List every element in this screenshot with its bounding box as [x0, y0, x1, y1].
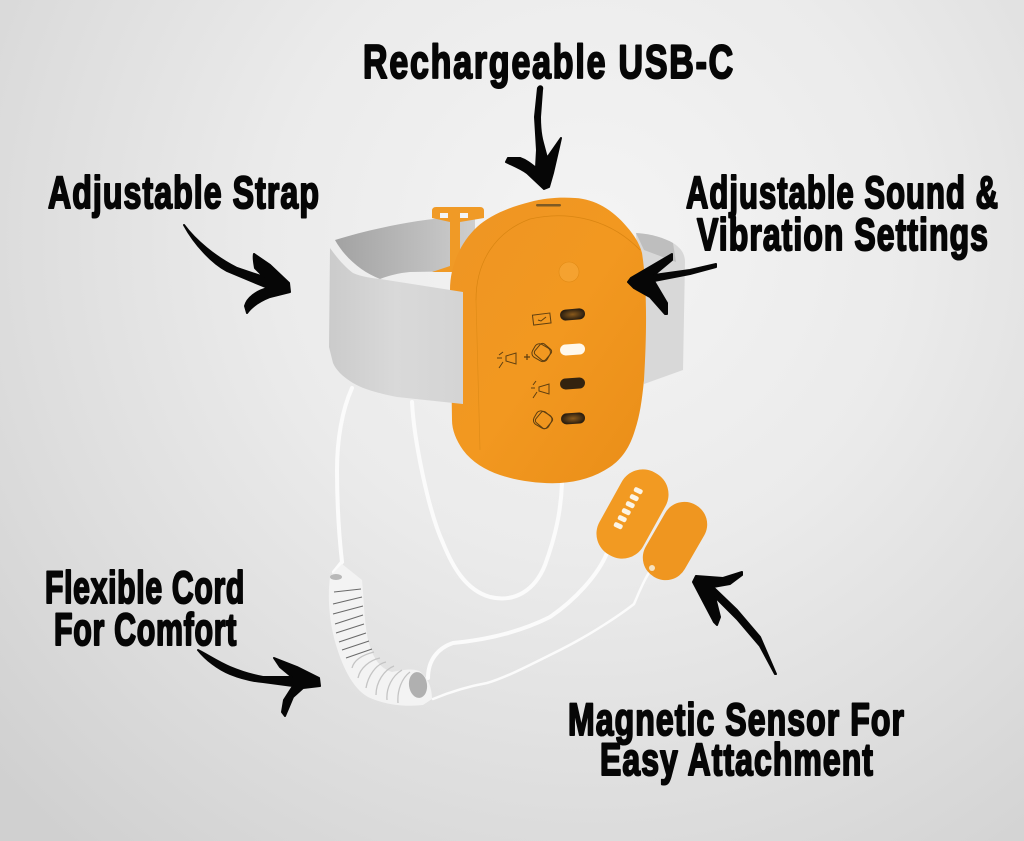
sensor clip with holes — [588, 461, 677, 567]
coiled cord — [329, 564, 432, 706]
USB-C port — [536, 204, 561, 206]
heading: Adjustable Strap: Adjustable Strap — [48, 167, 320, 218]
heading: Magnetic Sensor For Easy Attachment: Easy Attachment — [600, 734, 874, 785]
arrow: to strap — [184, 225, 290, 313]
heading: Flexible Cord For Comfort — [45, 562, 245, 655]
heading: Flexible Cord For Comfort: Flexible Cord — [45, 562, 245, 613]
button — [559, 262, 579, 282]
indicator lights — [560, 308, 585, 425]
heading: Adjustable Sound and Vibration Settings — [686, 167, 999, 260]
strap front — [329, 248, 463, 404]
arrow: to magnetic sensor — [693, 572, 776, 674]
arrow: to coiled cord — [198, 650, 320, 716]
heading: Magnetic Sensor For Easy Attachment — [568, 694, 905, 785]
indicator icons — [497, 313, 554, 431]
sensor magnet — [635, 494, 715, 588]
strap back — [335, 217, 475, 279]
heading: Flexible Cord For Comfort: For Comfort — [54, 604, 237, 655]
arrow: to USB-C port — [506, 86, 561, 189]
cords — [334, 388, 652, 699]
arrow: to device controls — [628, 254, 716, 314]
product: sensor device — [329, 198, 715, 706]
buckle — [432, 207, 484, 272]
heading: Rechargeable USB-C: Rechargeable USB-C — [363, 35, 735, 88]
device body — [450, 198, 646, 483]
